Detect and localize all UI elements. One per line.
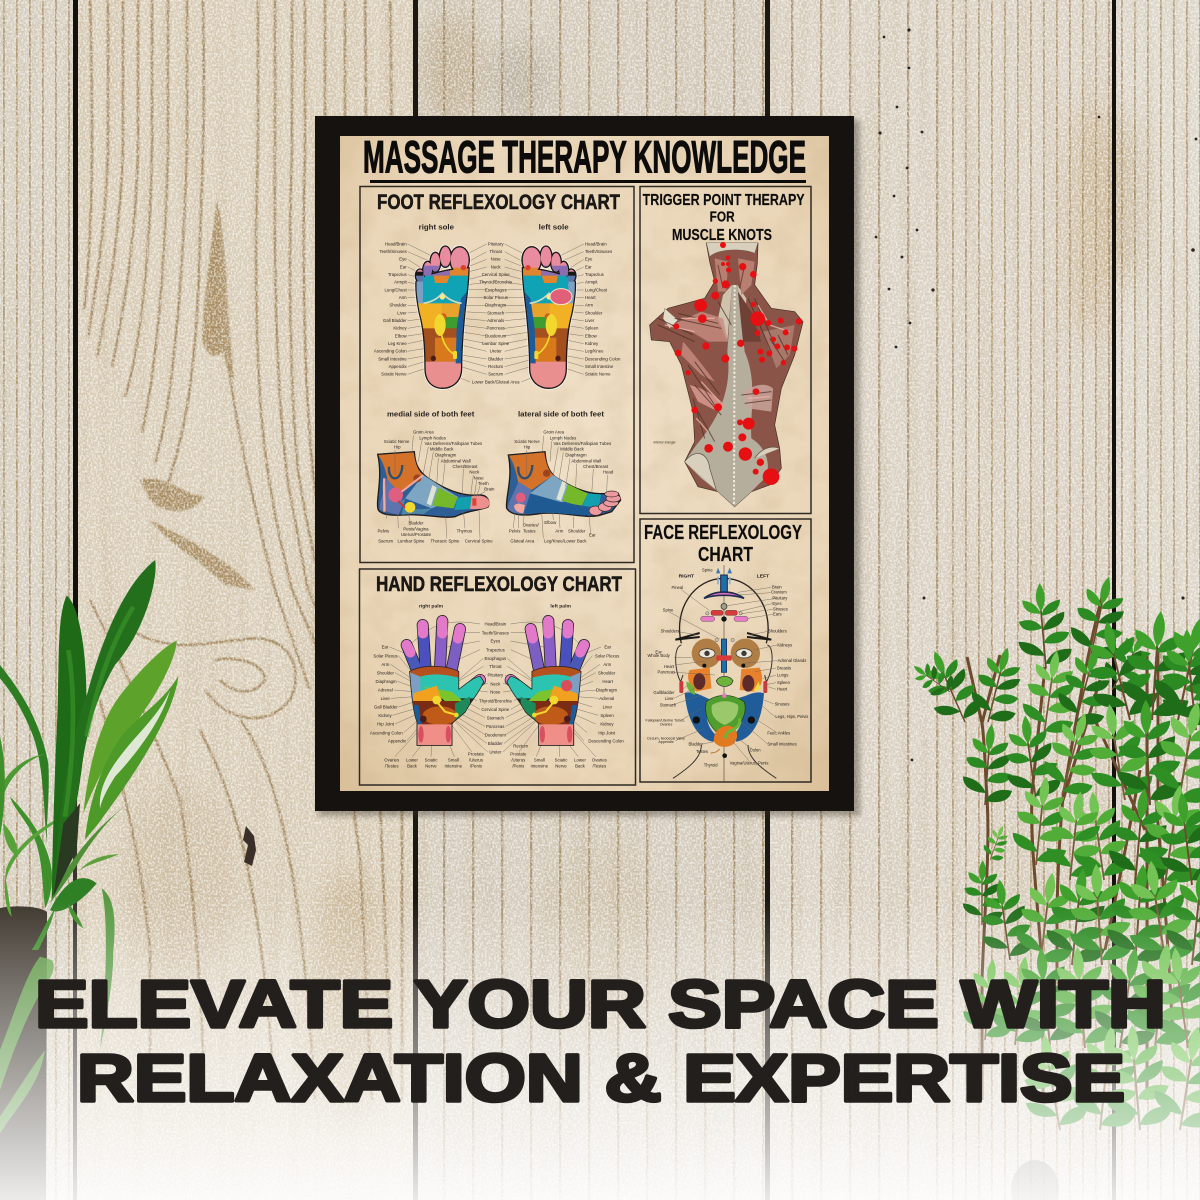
right sole labels	[374, 241, 408, 377]
right palm side labels	[370, 645, 485, 769]
face labels: Brain	[772, 584, 782, 589]
lateral foot	[506, 452, 621, 516]
side-of-feet diagrams: Sacrum	[378, 539, 394, 544]
heading: face reflexology: FACE REFLEXOLOGY	[644, 521, 802, 544]
side-of-feet diagrams: Chest/Breast	[583, 464, 609, 469]
side-of-feet diagrams: Abdominal Wall	[571, 458, 601, 463]
heading: face reflexology	[644, 521, 802, 566]
centre palm labels: Thyroid/Bronchia	[479, 698, 512, 703]
poster frame shadow	[318, 120, 860, 816]
foot soles diagram: left sole	[539, 225, 569, 232]
side-of-feet diagrams: Bladder	[409, 521, 424, 526]
side-of-feet diagrams: Diaphragm	[565, 453, 587, 458]
back muscle anatomy illustration: Inferior triangle	[653, 440, 676, 444]
right sole labels: Appendix	[389, 364, 407, 369]
right sole labels: Eye	[399, 257, 407, 262]
left sole labels: Spleen	[585, 326, 599, 331]
poster title: MASSAGE THERAPY KNOWLEDGE	[363, 132, 806, 182]
face labels: Whole Body	[647, 653, 671, 658]
left palm side labels: Ear	[604, 645, 612, 650]
right sole labels: Arm	[399, 295, 407, 300]
right sole labels: Small Intestine	[378, 356, 407, 361]
face labels: RIGHT	[679, 574, 694, 580]
right palm side labels: Small	[448, 758, 459, 763]
side-of-feet diagrams: Pelvis	[378, 528, 389, 533]
side-of-feet diagrams: Shoulder	[568, 528, 586, 533]
centre labels: Thyroid/Bronchia	[479, 280, 513, 285]
left palm side labels: Shoulder	[598, 670, 616, 675]
face labels: Bladder	[689, 742, 703, 747]
centre palm labels: Bladder	[488, 741, 503, 746]
left plant: potted stone	[0, 906, 47, 1200]
side-of-feet diagrams: Gluteal Area	[510, 539, 535, 544]
side-of-feet diagrams: Leg/Knee/Lower Back	[544, 539, 587, 544]
left palm side labels: Nerve	[555, 764, 567, 769]
heading: foot reflexology: FOOT REFLEXOLOGY CHART	[377, 191, 620, 214]
right palm side labels: Adrenal	[378, 688, 393, 693]
left sole labels: Descending Colon	[585, 356, 621, 361]
right palm side labels: Kidney	[378, 713, 393, 718]
centre palm labels: Stomach	[487, 715, 504, 720]
palms diagram	[370, 603, 624, 769]
panel: foot reflexology chart	[360, 186, 634, 562]
centre palm labels: Pituitary	[488, 673, 504, 678]
centre labels: Duodenum	[485, 333, 507, 338]
centre labels: Ureter	[490, 349, 502, 354]
right palm side labels: Shoulder	[377, 670, 395, 675]
side-of-feet diagrams: Vas Deferens/Fallopian Tubes	[424, 441, 482, 446]
side-of-feet diagrams: Abdominal Wall	[441, 458, 471, 463]
left palm side labels: Arm	[603, 662, 612, 667]
face labels: Gallbladder	[653, 690, 675, 695]
face labels: Liver	[665, 696, 674, 701]
left sole foot	[505, 242, 584, 390]
side-of-feet diagrams: Lumbar Spine	[398, 539, 425, 544]
centre palm labels: Rectum	[513, 743, 529, 748]
face labels	[646, 567, 808, 768]
right palm side labels: Gall Bladder	[374, 705, 398, 710]
face labels: Kidneys	[777, 642, 792, 647]
centre labels: Adrenals	[487, 318, 504, 323]
left palm side labels: /Penis	[512, 763, 524, 768]
side-of-feet diagrams: Cervical Spine	[465, 539, 493, 544]
side-of-feet diagrams: Lymph Nodes	[550, 435, 576, 440]
face labels: Spine	[702, 567, 713, 572]
face labels: Ears	[773, 612, 782, 617]
right sole labels: Lung/Chest	[385, 287, 407, 292]
right palm side labels: Sciatic	[425, 758, 438, 763]
side-of-feet diagrams: Brain	[484, 487, 495, 492]
right sole foot	[408, 242, 487, 390]
right palm side labels: Back	[407, 764, 418, 769]
foot soles diagram	[374, 225, 621, 390]
right sole labels: Sciatic Nerve	[381, 372, 407, 377]
side-of-feet diagrams: Hip	[524, 444, 531, 449]
left sole labels: Sciatic Nerve	[585, 372, 611, 377]
back muscle anatomy illustration	[650, 242, 803, 507]
palms diagram: left palm	[550, 603, 571, 609]
face labels: Pineal	[672, 585, 683, 590]
headline	[35, 967, 1166, 1116]
centre palm labels: Pancreas	[486, 724, 504, 729]
face labels: Heart	[664, 664, 675, 669]
side-of-feet diagrams: Penis/Vagina	[403, 526, 429, 531]
side-of-feet diagrams: Vas Deferens/Fallopian Tubes	[553, 441, 611, 446]
headline: RELAXATION & EXPERTISE	[77, 1041, 1125, 1116]
left sole labels: Ear	[585, 264, 592, 269]
centre labels: Pancreas	[487, 326, 505, 331]
left sole labels: Trapezius	[585, 272, 604, 277]
left sole labels: Elbow	[585, 333, 598, 338]
left sole labels: Kidney	[585, 341, 599, 346]
left sole labels: Teeth/Sinuses	[585, 249, 612, 254]
right palm side labels: Liver	[381, 696, 391, 701]
side-of-feet diagrams: Groin Area	[413, 430, 434, 435]
side-of-feet diagrams: Ovaries/	[523, 523, 540, 528]
centre labels: Diaphragm	[485, 303, 507, 308]
face labels: Lungs	[777, 673, 788, 678]
left palm side labels: Heart	[602, 679, 614, 684]
right palm side labels: Solar Plexus	[373, 653, 398, 658]
centre labels: Nose	[491, 257, 501, 262]
left palm side labels: Diaphragm	[596, 688, 618, 693]
left palm side labels: Lower	[574, 758, 586, 763]
left sole labels: Heart	[585, 295, 596, 300]
poster in black frame	[315, 116, 854, 811]
heading: hand reflexology: HAND REFLEXOLOGY CHART	[376, 573, 622, 596]
side-of-feet diagrams: Middle Back	[560, 447, 585, 452]
face labels: Heart	[777, 687, 788, 692]
face labels: Feet, Ankles	[767, 731, 790, 736]
right sole labels: Shoulder	[389, 303, 407, 308]
right sole labels: Teeth/Sinuses	[379, 249, 407, 254]
centre labels: Rectum	[488, 364, 504, 369]
side-of-feet diagrams: Thymus	[457, 528, 472, 533]
right palm side labels: Hip Joint	[377, 722, 395, 727]
side-of-feet diagrams: Testes	[523, 528, 536, 533]
panel: trigger point therapy	[640, 186, 811, 514]
face labels: Vagina/Uterus, Penis	[730, 761, 768, 766]
face labels: Stomach	[660, 703, 677, 708]
side-of-feet diagrams: Pelvis	[509, 528, 520, 533]
face labels: Testes	[696, 749, 708, 754]
left palm side labels: Hip Joint	[598, 730, 616, 735]
left palm side labels	[510, 645, 624, 769]
right sole labels: Gall Bladder	[383, 318, 407, 323]
side-of-feet diagrams: Sciatic Nerve	[384, 439, 410, 444]
heart zone on left sole	[550, 289, 572, 305]
centre labels	[472, 241, 520, 384]
palms diagram: right palm	[419, 603, 444, 609]
side-of-feet diagrams: medial side of both feet	[387, 411, 475, 418]
right palm side labels: Ovaries	[384, 758, 399, 763]
centre labels: Bladder	[488, 356, 504, 361]
heading: face reflexology: CHART	[698, 543, 753, 566]
centre labels: Esophagus	[485, 287, 507, 292]
face label leaders	[669, 587, 778, 762]
centre labels: Neck	[491, 264, 501, 269]
centre palm labels: Neck	[490, 681, 501, 686]
left sole labels: Small Intestine	[585, 364, 614, 369]
side-of-feet diagrams: lateral side of both feet	[518, 411, 605, 418]
left palm side labels: Descending Colon	[588, 739, 624, 744]
centre labels: Cervical Spine	[482, 272, 510, 277]
right sole labels: Ear	[400, 264, 407, 269]
right sole labels: Armpit	[394, 280, 407, 285]
centre palm labels: Trapezius	[486, 647, 505, 652]
face labels: Thyroid	[704, 763, 718, 768]
right sole labels: Head/Brain	[385, 241, 407, 246]
side-of-feet diagrams: Hip	[394, 444, 401, 449]
title rule	[370, 180, 806, 183]
face labels: Ovaries	[660, 722, 672, 726]
pale pot at bottom right	[1011, 1160, 1059, 1200]
centre palm labels: Head/Brain	[485, 622, 507, 627]
panel: face reflexology chart	[640, 519, 811, 782]
centre labels: Lumbar Spine	[482, 341, 510, 346]
heading: trigger point therapy: MUSCLE KNOTS	[672, 227, 772, 244]
side-of-feet diagrams: Groin Area	[543, 430, 565, 435]
face labels: Colon	[750, 747, 761, 752]
face labels: Cranium	[771, 590, 787, 595]
side-of-feet diagrams: Lymph Nodes	[419, 435, 446, 440]
side-of-feet diagrams: Head	[603, 470, 614, 475]
face labels: Legs, Hips, Pelvis	[775, 714, 808, 719]
right sole labels: Elbow	[395, 333, 408, 338]
centre palm labels: Throat	[489, 664, 502, 669]
right palm side labels: Arm	[381, 662, 390, 667]
tan grain spindle and knot rings	[140, 198, 255, 590]
right palm side labels: Appendix	[388, 739, 407, 744]
face labels: LEFT	[757, 574, 769, 580]
side-of-feet diagrams: Elbow	[544, 520, 557, 525]
left palm side labels: Prostate	[510, 752, 527, 757]
left palm side labels: Kidney	[600, 722, 614, 727]
face labels: Breasts	[777, 665, 791, 670]
right sole labels: Liver	[397, 310, 407, 315]
right palm side labels: /Penis	[470, 763, 482, 768]
right sole labels: Trapezius	[388, 272, 407, 277]
face labels: Small Intestines	[767, 741, 797, 746]
left palm hand	[503, 621, 601, 757]
left sole labels: Shoulder	[585, 310, 603, 315]
right palm side labels: Lower	[406, 758, 418, 763]
left plant: leaves	[0, 560, 178, 1133]
left sole labels: Arm	[585, 303, 593, 308]
face labels: Pancreas	[658, 670, 675, 675]
face labels: Cecum, Ileocecal Valve	[647, 736, 685, 740]
left sole labels: Leg/Knee	[585, 349, 604, 354]
side-of-feet diagrams: Nose	[474, 475, 484, 480]
nail holes and dark marks	[875, 28, 1197, 831]
side-of-feet diagrams: Arm	[555, 528, 564, 533]
face labels: Adrenal Glands	[778, 658, 806, 663]
right palm side labels: Diaphragm	[375, 679, 397, 684]
right palm side labels: Intensine	[445, 764, 463, 769]
side-of-feet diagrams: Diaphragm	[435, 453, 457, 458]
face labels: Fallopian/Uterine Tubes,	[646, 719, 685, 723]
left palm side labels: Adrenal	[599, 696, 614, 701]
right palm side labels: Prostate	[468, 752, 485, 757]
left palm side labels: Sciatic	[555, 758, 568, 763]
side-of-feet diagrams: Sciatic Nerve	[514, 439, 540, 444]
centre labels: Solar Plexus	[484, 295, 508, 300]
right sole labels: Kidney	[393, 326, 408, 331]
red trigger point markers	[673, 242, 802, 485]
left palm side labels: Intensine	[531, 764, 549, 769]
face labels: Shoulders	[661, 629, 679, 634]
centre palm labels: Teeth/Sinuses	[482, 630, 509, 635]
heading: trigger point therapy	[643, 192, 805, 244]
centre palm labels: Esophagus	[484, 656, 506, 661]
centre palm labels: Nose	[490, 690, 501, 695]
right palm side labels: /Testes	[385, 764, 399, 769]
centre palm labels	[479, 622, 529, 755]
right palm hand	[390, 621, 488, 757]
side-of-feet diagrams: Ear	[589, 533, 596, 538]
bottom fade to white	[0, 900, 1200, 1200]
left sole labels	[585, 241, 621, 377]
side-of-feet diagrams: Chest/Breast	[452, 464, 478, 469]
right palm side labels: Ear	[382, 645, 389, 650]
heading: trigger point therapy: FOR	[710, 210, 735, 226]
centre labels: Lower Back/Gluteal Area	[472, 379, 520, 384]
left palm side labels: Small	[534, 758, 545, 763]
face labels: Sinuses	[773, 606, 788, 611]
left sole labels: Liver	[585, 318, 595, 323]
face labels: Sinuses	[775, 701, 789, 706]
side-of-feet diagrams: Thoracic Spine	[431, 539, 460, 544]
centre palm labels: Eyes	[491, 639, 500, 644]
panel: hand reflexology chart	[360, 569, 636, 785]
side-of-feet diagrams: Uterus/Prostate	[401, 532, 432, 537]
face labels: Eyes	[772, 601, 782, 606]
side-of-feet diagrams	[378, 411, 621, 544]
right palm side labels: Nerve	[425, 764, 437, 769]
medial foot	[378, 452, 489, 517]
right sole labels: Ascending Colon	[374, 349, 407, 354]
side-of-feet diagrams: Teeth	[478, 481, 489, 486]
left sole labels: Lung/Chest	[585, 287, 608, 292]
centre palm labels: Duodenum	[485, 732, 506, 737]
right palm side labels: /Uterus	[469, 757, 483, 762]
side feet label leaders	[387, 436, 607, 538]
left sole labels: Eye	[585, 257, 593, 262]
left sole labels: Head/Brain	[585, 241, 607, 246]
centre palm labels: Cervical Spine	[481, 707, 510, 712]
centre labels: Stomach	[487, 310, 505, 315]
right plant: shrub foliage	[906, 572, 1200, 1135]
headline: ELEVATE YOUR SPACE WITH	[35, 967, 1166, 1042]
left sole labels: Armpit	[585, 280, 598, 285]
face labels: Shoulders	[768, 628, 787, 633]
left palm side labels: /Testes	[592, 764, 606, 769]
left palm side labels: Back	[575, 764, 586, 769]
centre labels: Sacrum	[488, 372, 504, 377]
face labels: Appendix	[658, 740, 674, 744]
face labels: Spine	[663, 608, 674, 613]
face labels: Pituitary	[772, 596, 788, 601]
left palm side labels: /Uterus	[511, 757, 525, 762]
right sole labels: Leg Knee	[388, 341, 407, 346]
centre labels: Throat	[489, 249, 503, 254]
heart zone on left palm	[561, 680, 572, 691]
left palm side labels: Spleen	[600, 713, 614, 718]
right palm side labels: Ascending Colon	[370, 730, 403, 735]
side-of-feet diagrams: Neck	[469, 470, 480, 475]
face labels: Ear	[655, 649, 663, 654]
foot soles diagram: right sole	[419, 225, 454, 232]
face map illustration	[673, 565, 776, 782]
left palm side labels: Solar Plexus	[595, 653, 619, 658]
left palm side labels: Liver	[603, 705, 613, 710]
heading: trigger point therapy: TRIGGER POINT THERAPY	[643, 192, 805, 209]
centre palm labels: Ureter	[489, 750, 502, 755]
face labels: Spleen	[777, 680, 791, 685]
centre labels: Pituitary	[488, 241, 504, 246]
left palm side labels: Ovaries	[592, 758, 607, 763]
side-of-feet diagrams: Middle Back	[430, 447, 454, 452]
